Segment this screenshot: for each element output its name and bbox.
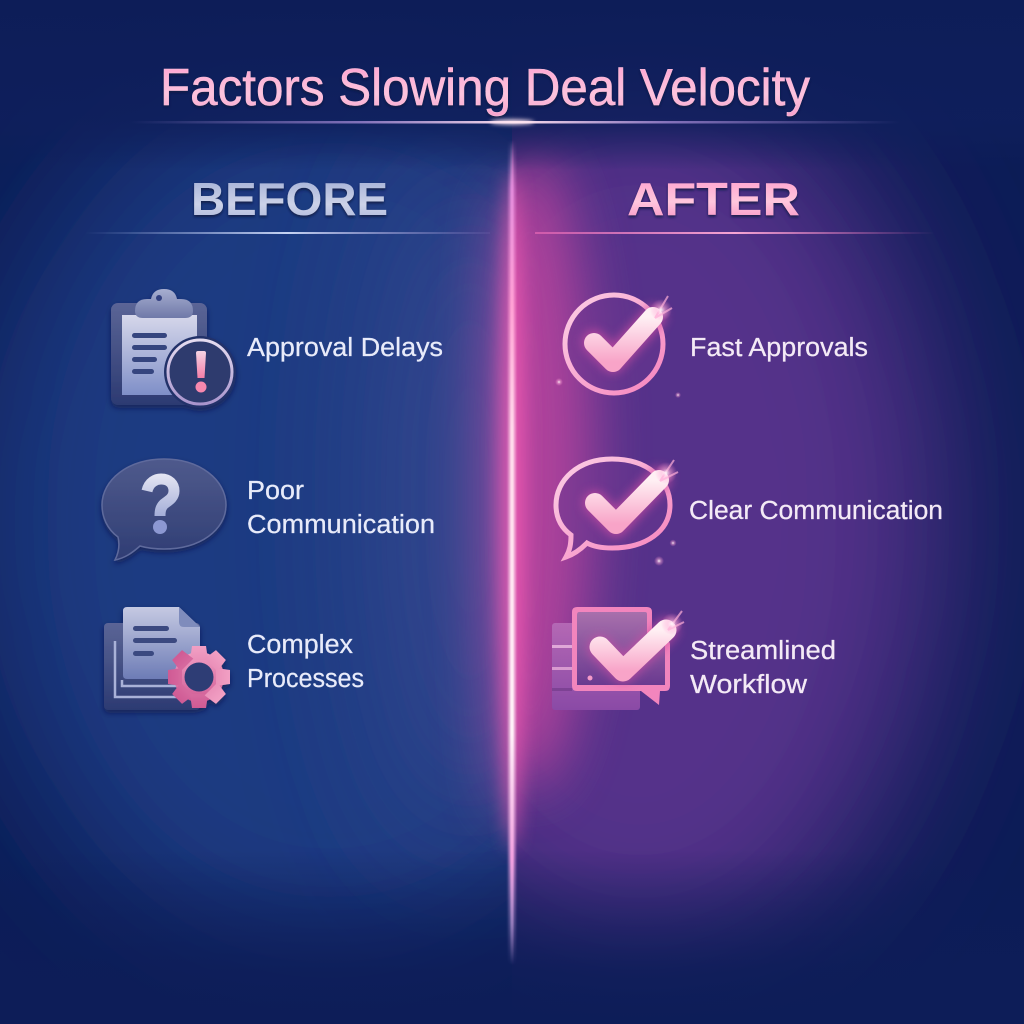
label: approval delays: Approval Delays [247, 334, 443, 362]
label: complex processes: Processes [247, 665, 364, 693]
label: clear communication: Clear Communication [689, 497, 943, 525]
icon: documents with gear [104, 607, 230, 710]
icon: check in circle [555, 295, 681, 398]
label: complex processes: Complex [247, 631, 353, 659]
after divider [535, 232, 935, 234]
label: streamlined workflow [690, 637, 836, 699]
panel: after items [552, 295, 943, 710]
icon: gear [168, 646, 230, 708]
label: fast approvals: Fast Approvals [690, 334, 868, 362]
label: poor communication: Poor [247, 477, 305, 505]
label: complex processes [247, 631, 364, 693]
icon: check on workflow panels [552, 607, 684, 710]
icon: clipboard with alert [111, 289, 236, 408]
center glowing divider [508, 140, 516, 965]
icon: speech bubble with question [102, 459, 226, 560]
panel: before items [102, 289, 443, 710]
label: poor communication: Communication [247, 511, 435, 539]
title: Factors Slowing Deal Velocity [160, 59, 810, 117]
label: poor communication [247, 477, 435, 539]
heading: after: AFTER [627, 173, 800, 225]
icon: check in speech bubble [556, 459, 678, 566]
label: streamlined workflow: Streamlined [690, 637, 836, 665]
label: streamlined workflow: Workflow [690, 671, 808, 699]
heading: before: BEFORE [191, 173, 388, 225]
title divider [130, 120, 900, 124]
before divider [85, 232, 490, 234]
